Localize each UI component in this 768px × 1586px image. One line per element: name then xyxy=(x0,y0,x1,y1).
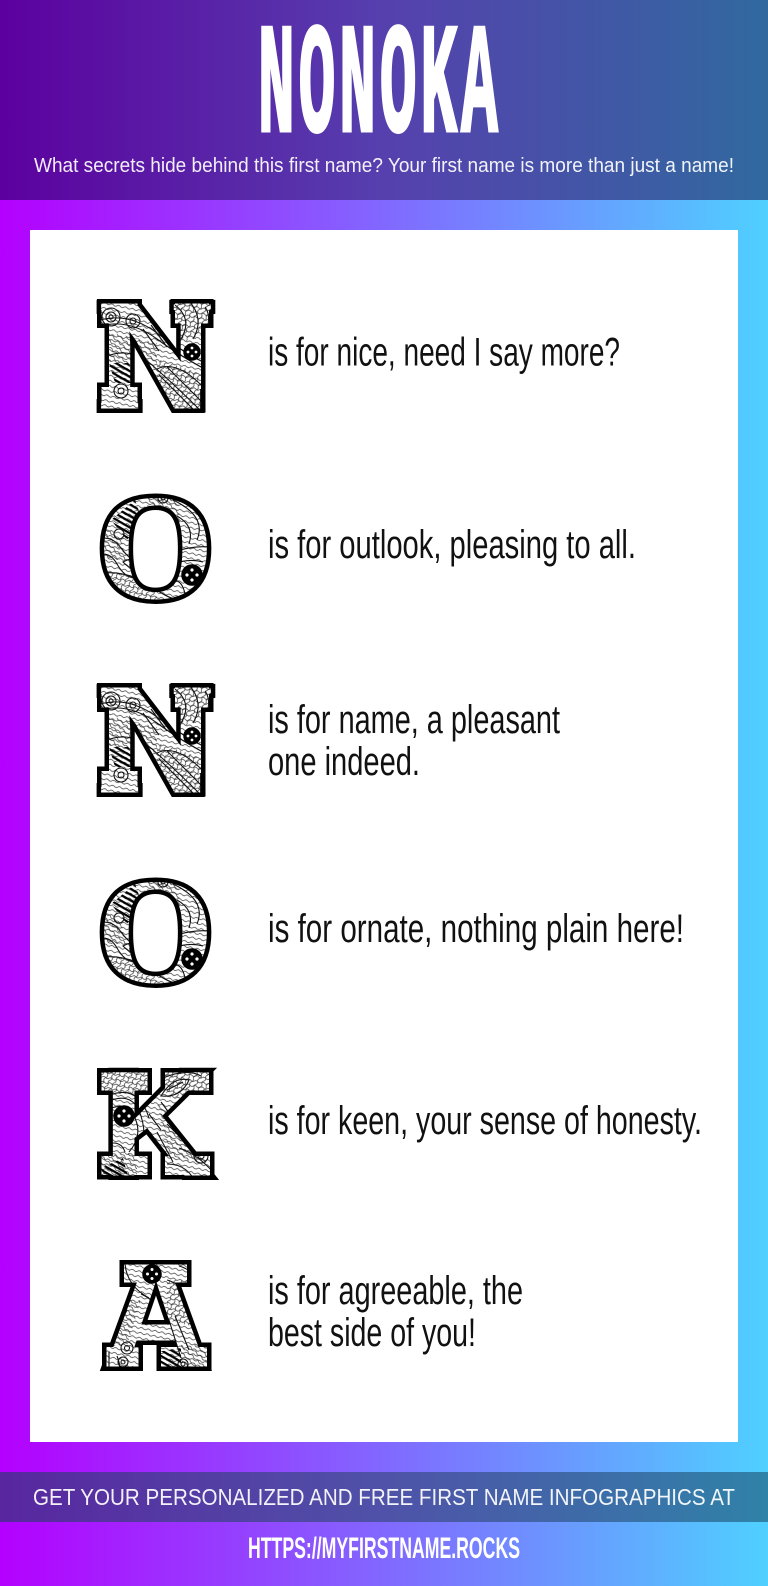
icon: ornate letter N: N xyxy=(98,268,213,444)
text: N lines xyxy=(268,698,560,784)
footer band xyxy=(0,1472,768,1522)
text: A lines: best side of you! xyxy=(268,1311,476,1355)
icon: ornate letter N: N xyxy=(101,656,210,826)
row 5: letter K xyxy=(102,1040,702,1208)
title: NONOKA xyxy=(258,0,502,178)
panel: white letter list xyxy=(30,230,738,1442)
icon: ornate letter O: O xyxy=(97,847,214,1015)
text: O line: is for outlook, pleasing to all. xyxy=(268,523,636,567)
text: N lines: is for name, a pleasant xyxy=(268,698,560,742)
icon: ornate letter K: K xyxy=(103,1040,211,1208)
icon: ornate letter N: N xyxy=(101,272,210,442)
icon: ornate letter O: O xyxy=(97,463,214,631)
icon: ornate letter A: A xyxy=(103,1234,209,1398)
text: N line: is for nice, need I say more? xyxy=(268,330,620,374)
icon: ornate letter A: A xyxy=(103,1234,209,1398)
row 2: letter O xyxy=(97,463,636,631)
row 4: letter O xyxy=(97,847,684,1015)
icon: ornate letter N: N xyxy=(98,652,213,828)
icon: ornate letter O: O xyxy=(97,463,214,631)
text: N lines: one indeed. xyxy=(268,740,420,784)
icon: ornate letter O: O xyxy=(97,847,214,1015)
row 1: letter N xyxy=(98,268,620,444)
icon: ornate letter K: K xyxy=(103,1040,211,1208)
icon: ornate letter N: N xyxy=(101,656,210,826)
text: A lines xyxy=(268,1269,523,1355)
panel: header xyxy=(0,0,768,200)
icon: ornate letter N: N xyxy=(98,268,213,444)
row 3: letter N xyxy=(98,652,560,828)
text: A lines: is for agreeable, the xyxy=(268,1269,523,1313)
subtitle: What secrets hide behind this first name? Your first name is more than just a name! xyxy=(34,155,734,177)
row 6: letter A xyxy=(103,1234,523,1398)
footer url: HTTPS://MYFIRSTNAME.ROCKS xyxy=(248,1532,520,1565)
icon: ornate letter N: N xyxy=(98,652,213,828)
icon: ornate letter N: N xyxy=(101,272,210,442)
